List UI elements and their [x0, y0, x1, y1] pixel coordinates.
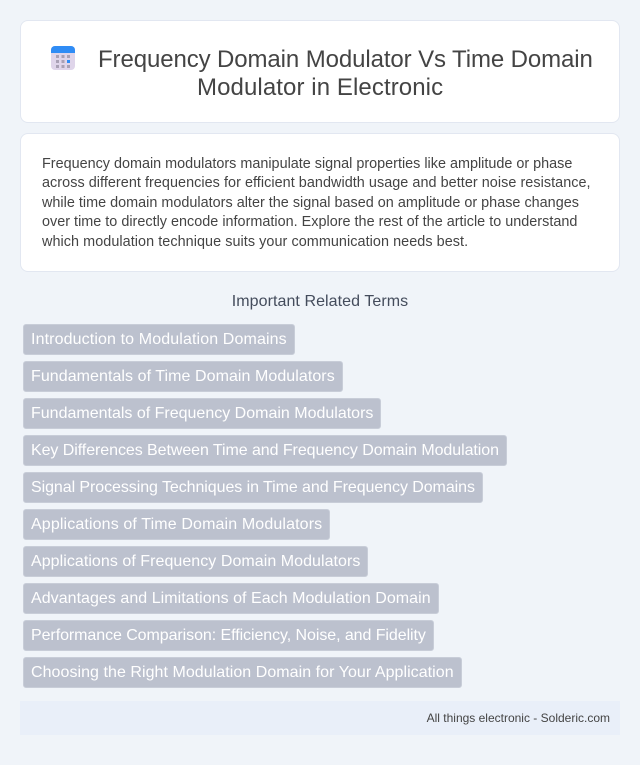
heading: important related terms: Important Related Terms: [232, 293, 408, 310]
chip: term 5: Signal Processing Techniques in Time and Frequency Domains: [31, 479, 475, 496]
chip: term 8: [23, 583, 439, 614]
footer bar: [20, 701, 620, 735]
chip: term 1: [23, 324, 295, 355]
chip: term 9: Performance Comparison: Efficiency, Noise, and Fidelity: [31, 627, 426, 644]
chip: term 10: [23, 657, 462, 688]
chip: term 1: Introduction to Modulation Domains: [31, 331, 287, 348]
chip: term 3: Fundamentals of Frequency Domain Modulators: [31, 405, 373, 422]
chip: term 4: Key Differences Between Time and Frequency Domain Modulation: [31, 442, 499, 459]
chip: term 7: [23, 546, 368, 577]
text block: description: which modulation technique suits your communication needs best.: [42, 234, 468, 250]
text block: description: across different frequencies for efficient bandwidth usage and better noise resistance,: [42, 175, 591, 191]
chip: term 5: [23, 472, 483, 503]
text block: description: Frequency domain modulators manipulate signal properties like amplitude or phase: [42, 156, 572, 172]
text block: description: over time to directly encode information. Explore the rest of the article to understand: [42, 214, 577, 230]
text block: description: while time domain modulators alter the signal based on amplitude or phase changes: [42, 195, 579, 211]
chip: term 2: [23, 361, 343, 392]
chip: term 2: Fundamentals of Time Domain Modulators: [31, 368, 335, 385]
title second line: Modulator in Electronic: [197, 74, 443, 101]
chip: term 3: [23, 398, 381, 429]
chip: term 9: [23, 620, 434, 651]
chip: term 7: Applications of Frequency Domain Modulators: [31, 553, 360, 570]
panel: title card: [20, 20, 620, 123]
chip: term 10: Choosing the Right Modulation Domain for Your Application: [31, 664, 454, 681]
chip: term 6: [23, 509, 330, 540]
chip: term 4: [23, 435, 507, 466]
title: Frequency Domain Modulator Vs Time Domain: [98, 46, 593, 73]
icon: calendar grid: [51, 46, 75, 70]
panel: description card: [20, 133, 620, 272]
chip: term 6: Applications of Time Domain Modulators: [31, 516, 322, 533]
chip: term 8: Advantages and Limitations of Each Modulation Domain: [31, 590, 431, 607]
text block: description: [42, 156, 591, 250]
footer text: All things electronic - Solderic.com: [427, 711, 610, 725]
